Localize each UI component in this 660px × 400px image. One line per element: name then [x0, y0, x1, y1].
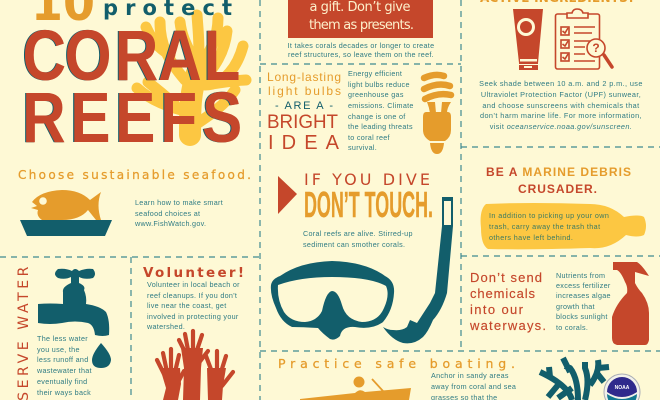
conserve water text: you use, the	[37, 345, 80, 354]
icon: faucet	[38, 269, 111, 368]
boating text: away from coral and sea	[431, 382, 516, 391]
light bulbs heading: IDEA	[268, 132, 340, 154]
sunscreen text: visit oceanservice.noaa.gov/sunscreen.	[490, 122, 632, 131]
light bulbs heading: Long-lasting	[267, 70, 341, 84]
icon: spray bottle	[612, 262, 649, 345]
chemicals text: to corals.	[556, 323, 588, 332]
panel: volunteer	[143, 265, 244, 400]
volunteer text: live near the coast, get	[147, 301, 227, 310]
boating heading: Practice safe boating.	[278, 356, 515, 371]
conserve water text: their ways back	[37, 388, 91, 397]
seafood text: seafood choices at	[135, 209, 200, 218]
icon: light bulb	[423, 75, 451, 154]
seafood text: www.FishWatch.gov.	[134, 219, 206, 228]
dive text: Coral reefs are alive. Stirred-up	[303, 229, 413, 238]
boating text: Anchor in sandy areas	[431, 371, 509, 380]
light bulbs text: light bulbs reduce	[348, 80, 410, 89]
light bulbs text: to coral reef	[348, 133, 390, 142]
dive heading: IF YOU DIVE	[304, 170, 430, 189]
panel: title	[21, 0, 246, 157]
light bulbs text: Energy efficient	[348, 69, 402, 78]
sunscreen text: don’t harm marine life. For more information,	[480, 111, 642, 120]
red banner: a gift. Don’t give	[310, 0, 410, 15]
volunteer text: Volunteer in local beach or	[147, 280, 240, 289]
snorkel window	[444, 201, 451, 225]
icon: fish on plate	[20, 190, 112, 236]
panel: light bulbs	[267, 69, 451, 154]
title word: reefs: REEFS	[22, 77, 242, 157]
icon: teal coral	[540, 358, 609, 400]
coral gift text: It takes corals decades or longer to create	[288, 41, 434, 50]
light bulbs text: survival.	[348, 143, 377, 152]
coral gift text: reef structures, so leave them on the reef.	[288, 50, 434, 59]
debris heading: BE A MARINE DEBRIS	[486, 165, 631, 179]
chemicals text: growth that	[556, 302, 595, 311]
volunteer text: watershed.	[146, 322, 185, 331]
conserve water text: less runoff and	[37, 355, 89, 364]
red banner	[288, 0, 433, 38]
icon: boat	[300, 376, 411, 400]
volunteer heading: Volunteer!	[143, 265, 244, 281]
panel: sustainable seafood	[18, 168, 251, 236]
light bulbs text: greenhouse gas	[348, 90, 404, 99]
panel: don't take coral as a gift	[288, 0, 434, 59]
seafood heading: Choose sustainable seafood.	[18, 168, 251, 182]
debris text: others have left behind.	[489, 233, 573, 242]
conserve water text: eventually find	[37, 377, 87, 386]
debris text: trash, carry away the trash that	[489, 222, 600, 231]
panel: conserve water	[16, 263, 111, 400]
light bulbs heading: light bulbs	[268, 84, 341, 98]
debris heading	[486, 165, 631, 196]
chemicals text: increases algae	[556, 291, 611, 300]
title word: coral: CORAL	[23, 15, 240, 95]
icon: NOAA logo	[604, 374, 640, 400]
icon: plastic bottle	[481, 203, 646, 249]
seafood text: Learn how to make smart	[135, 198, 223, 207]
icon: raised hands	[157, 331, 233, 400]
debris heading: CRUSADER.	[518, 182, 597, 196]
panel: marine debris	[481, 165, 646, 249]
panel: if you dive	[271, 170, 453, 343]
light bulbs text: change is one of	[348, 112, 406, 121]
icon: clipboard and magnifier: ?	[592, 41, 600, 55]
chemicals text: blocks sunlight	[556, 312, 608, 321]
light bulbs heading: BRIGHT	[267, 112, 338, 133]
volunteer text: reef cleanups. If you don't	[147, 291, 237, 300]
dive text: sediment can smother corals.	[303, 240, 405, 249]
icon: clipboard and magnifier	[556, 9, 612, 69]
decorative coral illustration	[137, 15, 246, 135]
icon: sunscreen tube	[513, 9, 543, 70]
title word: reefs: REEFS	[21, 77, 241, 157]
dive heading	[304, 170, 433, 225]
light bulbs heading: - ARE A -	[275, 100, 333, 112]
chemicals heading: Don’t send	[470, 270, 542, 285]
sunscreen text: Seek shade between 10 a.m. and 2 p.m., use	[479, 79, 643, 88]
chemicals text: Nutrients from	[556, 271, 605, 280]
chemicals heading: into our	[470, 302, 524, 317]
panel: chemicals	[469, 262, 649, 345]
panel: sunscreen	[479, 0, 643, 131]
chemicals heading: waterways.	[469, 318, 546, 333]
conserve water text: The less water	[37, 334, 88, 343]
chemicals heading: chemicals	[470, 286, 536, 301]
title word: coral: CORAL	[22, 15, 239, 95]
volunteer text: involved in protecting your	[147, 312, 239, 321]
icon: snorkel	[383, 197, 453, 343]
chemicals text: excess fertilizer	[556, 281, 611, 290]
sunscreen text: Ultraviolet Protection Factor (UPF) sunwear,	[481, 90, 641, 99]
panel: safe boating	[278, 356, 516, 400]
conserve water text: wastewater that	[36, 366, 92, 375]
debris text: In addition to picking up your own	[489, 211, 609, 220]
icon: diving mask	[271, 261, 394, 340]
panel: if you dive: DON’T TOUCH.	[304, 184, 433, 225]
icon: NOAA logo: NOAA	[615, 385, 630, 391]
chemicals heading	[469, 270, 546, 333]
sunscreen text: and choose sunscreens with chemicals that	[482, 101, 640, 110]
light bulbs heading	[267, 70, 341, 154]
light bulbs text: emissions. Climate	[348, 101, 414, 110]
arrow	[278, 176, 297, 214]
red banner: them as presents.	[309, 18, 414, 33]
light bulbs text: the leading threats	[348, 122, 413, 131]
